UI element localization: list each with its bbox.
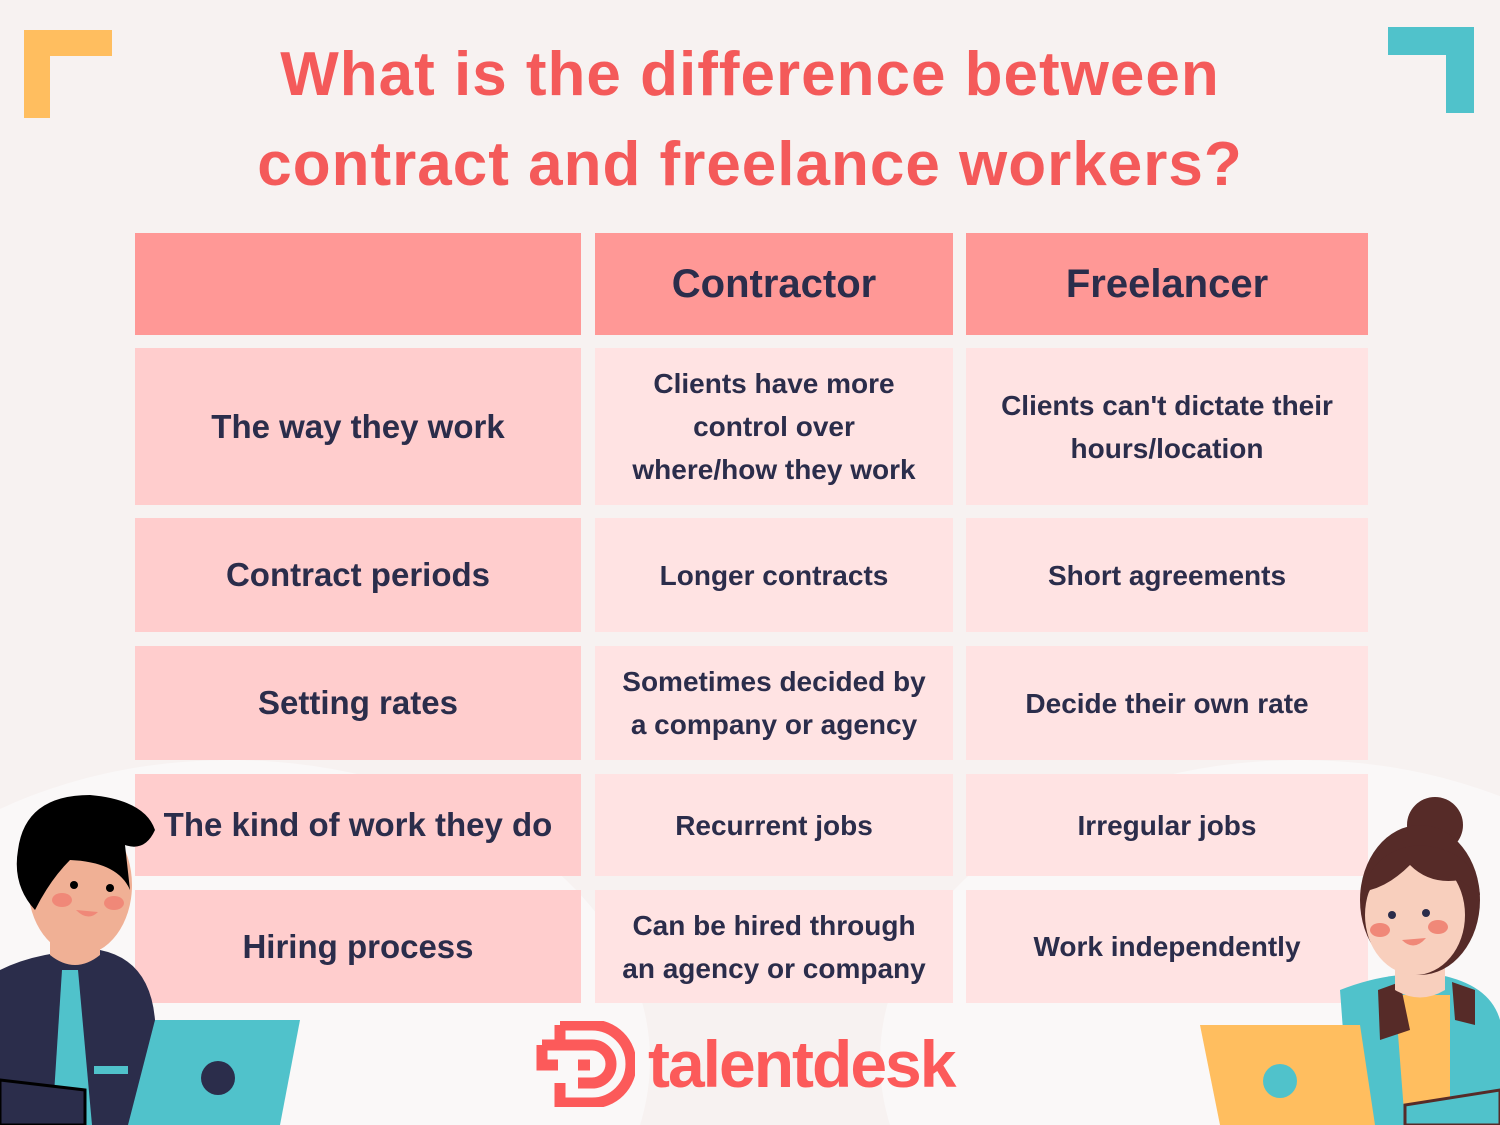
title: contract and freelance workers?	[257, 130, 1243, 199]
row: the way they work: The way they work	[211, 408, 505, 444]
row: setting rates: Setting rates	[258, 684, 458, 721]
title: What is the difference between	[280, 40, 1220, 109]
table: Can be hired through	[632, 910, 916, 940]
logo: talentdesk	[536, 1021, 956, 1107]
table: Clients can't dictate their	[1001, 390, 1333, 420]
row: setting rates	[135, 646, 581, 760]
illustration: man with laptop	[0, 795, 300, 1125]
row: hiring process: Hiring process	[242, 928, 474, 964]
row: hiring process	[135, 890, 581, 1003]
row: contract periods: Contract periods	[226, 556, 490, 593]
table: control over	[693, 411, 855, 442]
table: Clients have more	[653, 368, 895, 399]
icon: logo mark	[536, 1021, 635, 1107]
table: where/how they work	[632, 454, 916, 485]
table: Freelancer	[1066, 262, 1268, 306]
wordmark: talentdesk	[648, 1027, 954, 1101]
table: hours/location	[1071, 432, 1263, 464]
table: Short agreements	[1048, 560, 1286, 590]
row: kind of work	[135, 774, 581, 876]
table: Longer contracts	[660, 560, 888, 590]
row: contract periods	[135, 518, 581, 632]
illustration: woman with laptop	[1200, 797, 1500, 1125]
header row	[135, 233, 581, 335]
table: an agency or company	[622, 952, 926, 984]
table: Contractor	[672, 262, 876, 306]
row: kind of work: The kind of work they do	[164, 806, 552, 843]
table: Irregular jobs	[1078, 810, 1256, 840]
table: a company or agency	[631, 709, 917, 740]
title	[257, 40, 1243, 199]
row: the way they work	[135, 348, 581, 505]
table: Recurrent jobs	[675, 810, 873, 840]
table: Work independently	[1033, 931, 1301, 962]
table: Sometimes decided by	[622, 666, 926, 697]
table: Decide their own rate	[1025, 688, 1309, 718]
corner: teal	[1388, 27, 1474, 113]
corner: orange	[24, 30, 112, 118]
